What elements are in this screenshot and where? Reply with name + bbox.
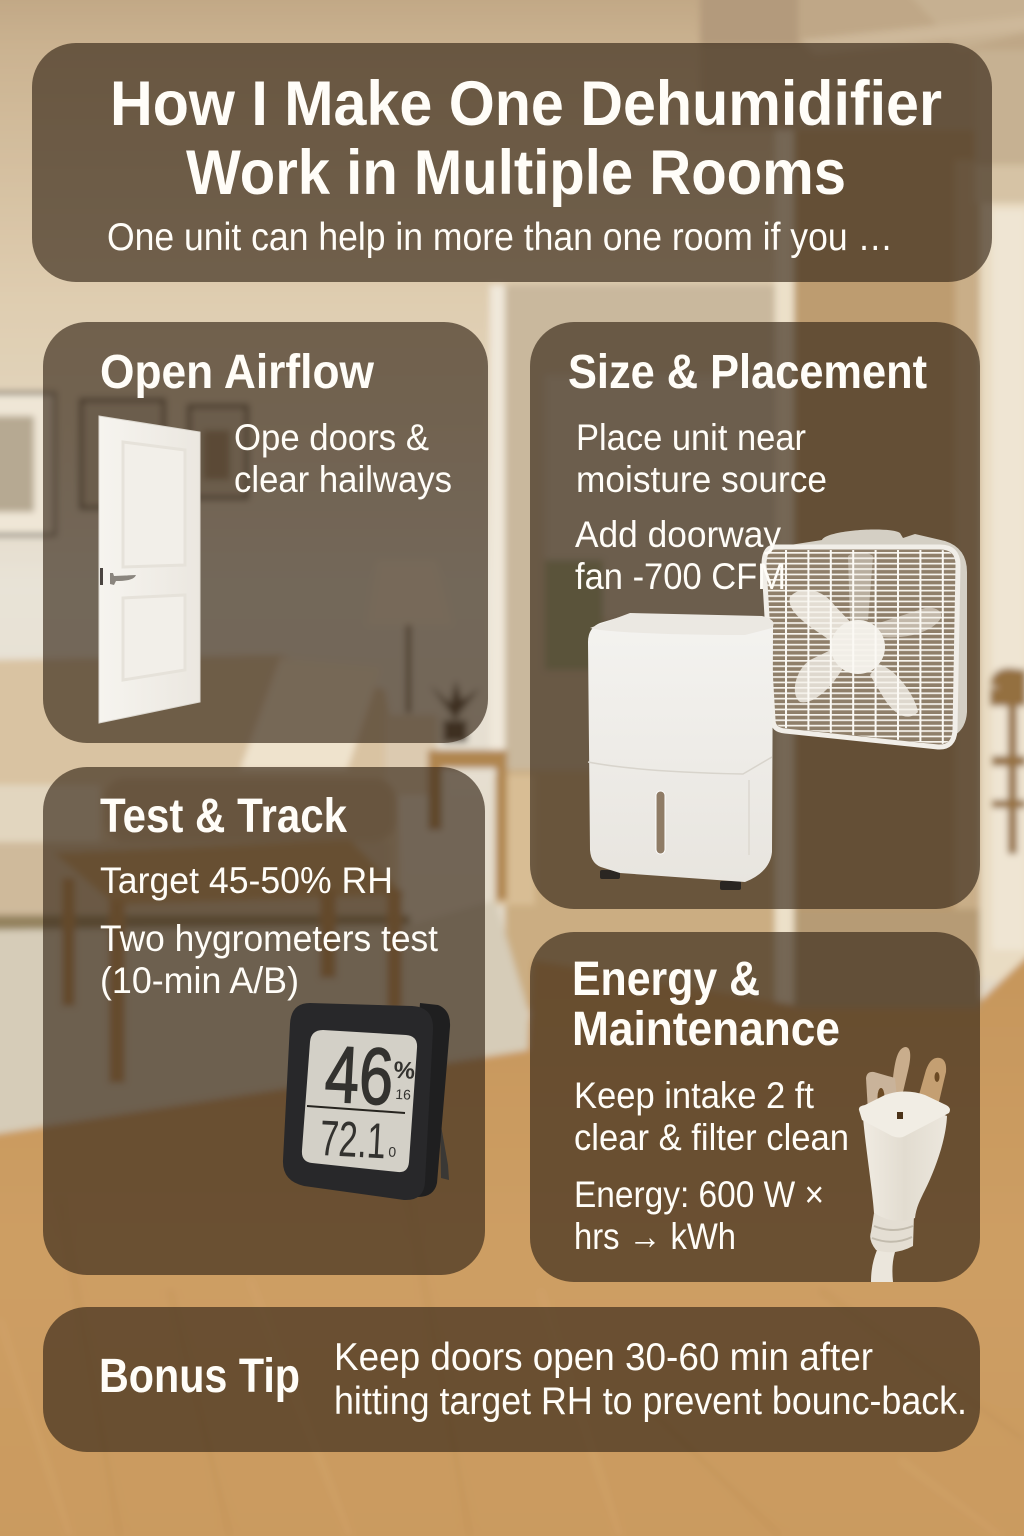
text: hygrometer test xyxy=(100,918,439,1001)
panel: bonus tip xyxy=(43,1307,980,1452)
panel: test and track xyxy=(43,767,485,1275)
text: keep intake clear xyxy=(574,1075,849,1158)
panel: size and placement xyxy=(530,322,980,909)
icon: digital hygrometer: 16 xyxy=(395,1086,412,1103)
panel: energy and maintenance xyxy=(530,932,980,1282)
text: bonus tip body xyxy=(334,1336,967,1423)
title: Work in Multiple Rooms xyxy=(186,138,846,208)
panel: open airflow xyxy=(43,322,488,743)
icon: digital hygrometer: 0 xyxy=(388,1144,397,1160)
icon: white door xyxy=(99,416,200,723)
icon: dehumidifier xyxy=(588,613,774,890)
text: doorway fan: Add doorway xyxy=(575,514,781,555)
text: doorway fan xyxy=(575,514,786,597)
heading: energy and maintenance xyxy=(572,953,840,1056)
icon: digital hygrometer: % xyxy=(393,1057,416,1085)
text: keep intake clear: clear & filter clean xyxy=(574,1117,849,1158)
text: open doors: clear hailways xyxy=(234,459,452,500)
heading: bonus tip: Bonus Tip xyxy=(99,1350,300,1403)
text: doorway fan: fan -700 CFM xyxy=(575,556,786,597)
title xyxy=(110,69,942,208)
text: keep intake clear: Keep intake 2 ft xyxy=(574,1075,815,1116)
heading: open airflow: Open Airflow xyxy=(100,346,375,399)
text: place unit: Place unit near xyxy=(576,417,806,458)
heading: test and track: Test & Track xyxy=(100,790,347,843)
panel: title xyxy=(32,43,992,282)
text: energy formula: hrs → kWh xyxy=(574,1216,736,1257)
icon: digital hygrometer: 72.1 xyxy=(318,1110,387,1169)
heading: energy and maintenance: Maintenance xyxy=(572,1003,840,1056)
text: open doors: Ope doors & xyxy=(234,417,429,458)
text: energy formula: Energy: 600 W × xyxy=(574,1174,824,1215)
text: place unit xyxy=(576,417,827,500)
text: place unit: moisture source xyxy=(576,459,827,500)
text: target humidity: Target 45-50% RH xyxy=(100,860,393,901)
text: bonus tip body: Keep doors open 30-60 min after xyxy=(334,1336,873,1379)
subtitle: One unit can help in more than one room if you … xyxy=(107,216,893,259)
heading: size and placement: Size & Placement xyxy=(568,346,927,399)
icon: digital hygrometer xyxy=(283,1003,450,1200)
heading: energy and maintenance: Energy & xyxy=(572,953,760,1006)
title: How I Make One Dehumidifier xyxy=(110,69,942,139)
text: bonus tip body: hitting target RH to prevent bounc-back. xyxy=(334,1380,967,1423)
text: hygrometer test: Two hygrometers test xyxy=(100,918,439,959)
icon: power plug xyxy=(859,1047,950,1282)
icon: box fan xyxy=(762,529,967,749)
text: hygrometer test: (10-min A/B) xyxy=(100,960,299,1001)
text: energy formula xyxy=(574,1174,824,1257)
text: open doors xyxy=(234,417,452,500)
icon: digital hygrometer: 46 xyxy=(323,1029,396,1122)
